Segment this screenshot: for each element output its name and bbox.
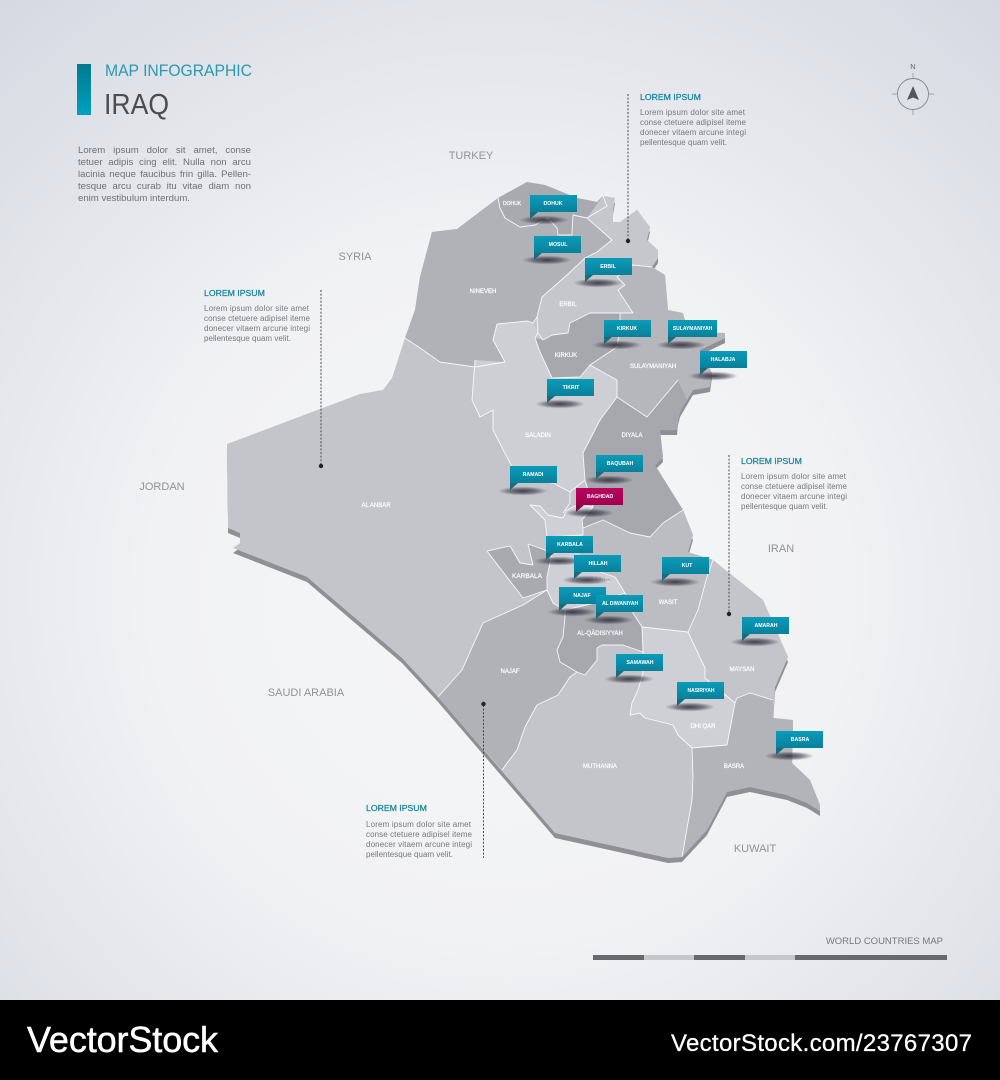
pin: Tikrit bbox=[535, 379, 594, 408]
pin: Karbala bbox=[534, 536, 593, 566]
pin: Samawah: SAMAWAH bbox=[626, 660, 654, 666]
pin: Dohuk bbox=[519, 195, 577, 224]
pin: Baqubah bbox=[584, 455, 643, 484]
footer band bbox=[0, 1000, 1000, 1080]
pin: Erbil: ERBIL bbox=[600, 264, 617, 270]
pin: Amarah: AMARAH bbox=[754, 623, 778, 629]
callout top: Lorem ipsum dolor site amet bbox=[640, 108, 746, 117]
pin: Kut: KUT bbox=[682, 563, 693, 569]
pin: Najaf: NAJAF bbox=[573, 593, 591, 599]
footer band: VectorStock.com/23767307 bbox=[671, 1030, 972, 1057]
callout right: conse ctetuere adipisel iteme bbox=[741, 482, 848, 491]
callout left: donecer vitaem arcune integi bbox=[204, 324, 310, 333]
region: Najaf bbox=[438, 590, 577, 770]
region: Saladin bbox=[472, 321, 617, 492]
callout bottom: LOREM IPSUM bbox=[366, 803, 427, 813]
callout right: donecer vitaem arcune integi bbox=[741, 492, 847, 501]
pin: Halabja bbox=[688, 351, 747, 380]
region: Erbil bbox=[537, 196, 658, 340]
pin: Ramadi bbox=[498, 466, 557, 496]
region: Dohuk bbox=[498, 182, 607, 235]
region: Wasit bbox=[578, 510, 713, 632]
region: Nineveh bbox=[405, 198, 612, 367]
region labels: DOHUK bbox=[503, 201, 522, 207]
pin: Halabja: HALABJA bbox=[711, 357, 736, 363]
callout bottom: Lorem ipsum dolor site amet bbox=[366, 820, 472, 829]
region: Kirkuk bbox=[535, 313, 620, 378]
region: Maysan bbox=[688, 560, 788, 703]
pin: Al Diwaniyah bbox=[584, 595, 643, 624]
pin: Al Diwaniyah: AL DIWANIYAH bbox=[602, 601, 638, 607]
pin: Kut bbox=[650, 557, 709, 586]
pin: Hillah bbox=[562, 555, 621, 584]
callout right: Lorem ipsum dolor site amet bbox=[741, 472, 847, 481]
callout top: pellentesque quam velit. bbox=[640, 138, 727, 147]
pin: Basra bbox=[764, 731, 823, 760]
pin: Kirkuk: KIRKUK bbox=[617, 326, 637, 332]
neighbouring country labels: SYRIA bbox=[338, 251, 372, 263]
map of Iraq bbox=[227, 182, 820, 863]
pin: Ramadi: RAMADI bbox=[523, 472, 544, 478]
pin: Kirkuk bbox=[592, 320, 651, 350]
pin: Erbil bbox=[573, 258, 632, 288]
pin: Sulaymaniyah: SULAYMANIYAH bbox=[673, 326, 713, 332]
intro paragraph bbox=[78, 145, 251, 204]
region labels: NINEVEH bbox=[470, 289, 496, 295]
neighbouring country labels: TURKEY bbox=[449, 150, 494, 162]
region labels: BASRA bbox=[724, 764, 744, 770]
scale caption: WORLD COUNTRIES MAP bbox=[826, 936, 943, 947]
callout left: pellentesque quam velit. bbox=[204, 334, 291, 343]
region labels: DHI QAR bbox=[690, 724, 716, 730]
callout top bbox=[626, 92, 747, 243]
region labels: DIYALA bbox=[622, 433, 642, 439]
callout top: donecer vitaem arcune integi bbox=[640, 128, 746, 137]
pin: Nasiriyah bbox=[665, 682, 724, 712]
region: Diyala bbox=[582, 380, 687, 537]
pin: Samawah bbox=[604, 654, 663, 684]
region: Muthanna bbox=[502, 645, 693, 858]
pin: Mosul: MOSUL bbox=[549, 242, 568, 248]
pin: Nasiriyah: NASIRIYAH bbox=[687, 688, 715, 694]
region labels: MUTHANNA bbox=[583, 764, 617, 770]
callout top: LOREM IPSUM bbox=[640, 92, 701, 102]
region: Karbala bbox=[487, 544, 552, 598]
callout bottom: conse ctetuere adipisel iteme bbox=[366, 830, 473, 839]
neighbouring country labels: JORDAN bbox=[139, 481, 185, 493]
pin: Dohuk: DOHUK bbox=[543, 201, 563, 207]
title: map infographic: MAP INFOGRAPHIC bbox=[105, 62, 252, 80]
region labels: AL-QĀDISIYYAH bbox=[577, 630, 623, 637]
region labels: KIRKUK bbox=[555, 353, 577, 359]
region labels: NAJAF bbox=[500, 669, 520, 675]
callout top: conse ctetuere adipisel iteme bbox=[640, 118, 747, 127]
map 3D depth bbox=[227, 187, 820, 863]
region labels: SALADIN bbox=[525, 433, 551, 439]
region labels: ERBIL bbox=[559, 302, 577, 308]
callout right: LOREM IPSUM bbox=[741, 456, 802, 466]
callout bottom bbox=[366, 702, 486, 859]
scale bar bbox=[593, 955, 947, 960]
pin: Hillah: HILLAH bbox=[588, 561, 608, 567]
footer band: VectorStock bbox=[27, 1019, 219, 1060]
callout right bbox=[727, 455, 848, 616]
region labels bbox=[361, 201, 754, 770]
pin: Najaf bbox=[547, 587, 606, 616]
neighbouring country labels: IRAN bbox=[768, 543, 794, 555]
region: Al-Qadisiyyah bbox=[557, 593, 643, 675]
region: Dhi Qar bbox=[630, 627, 735, 748]
pin: Mosul bbox=[522, 236, 581, 264]
callout bottom: pellentesque quam velit. bbox=[366, 850, 453, 859]
neighbouring country labels: KUWAIT bbox=[734, 843, 776, 855]
region labels: KARBALA bbox=[512, 573, 543, 580]
title accent bar bbox=[77, 64, 91, 115]
pin: Baghdad: BAGHDAD bbox=[587, 494, 614, 500]
region: Basra bbox=[682, 693, 820, 857]
callout left: Lorem ipsum dolor site amet bbox=[204, 304, 310, 313]
region labels: AL ANBAR bbox=[361, 503, 391, 509]
pin: Amarah bbox=[730, 617, 789, 646]
intro paragraph: lacinia neque faucibus frin gilla. Pellen- bbox=[78, 169, 251, 180]
region: Babil bbox=[547, 535, 625, 610]
pin: Basra: BASRA bbox=[791, 737, 809, 743]
icon: compass bbox=[892, 62, 934, 115]
callout left: conse ctetuere adipisel iteme bbox=[204, 314, 311, 323]
callout right: pellentesque quam velit. bbox=[741, 502, 828, 511]
region: Al Anbar bbox=[227, 182, 820, 858]
pin: Baqubah: BAQUBAH bbox=[607, 461, 634, 467]
pin: Baghdad bbox=[564, 488, 623, 518]
icon: compass: N bbox=[910, 62, 916, 71]
neighbouring country labels bbox=[139, 150, 794, 855]
region labels: SULAYMANIYAH bbox=[630, 364, 676, 370]
neighbouring country labels: SAUDI ARABIA bbox=[268, 687, 345, 699]
intro paragraph: Lorem ipsum dolor sit amet, conse bbox=[78, 145, 251, 156]
region labels: BABIL bbox=[592, 578, 610, 584]
region labels: WASIT bbox=[659, 600, 678, 606]
title: Iraq: IRAQ bbox=[104, 89, 169, 121]
region labels: MAYSAN bbox=[730, 667, 754, 673]
region: Sulaymaniyah bbox=[590, 265, 725, 417]
pin: Tikrit: TIKRIT bbox=[563, 385, 580, 391]
pin: Sulaymaniyah bbox=[656, 320, 717, 350]
intro paragraph: enim vestibulum interdum. bbox=[78, 193, 190, 204]
intro paragraph: tesque arcu curab itu vitae diam non bbox=[78, 181, 251, 192]
intro paragraph: tetuer adipis cing elit. Nulla non arcu bbox=[78, 157, 251, 168]
region: Baghdad bbox=[530, 505, 593, 537]
callout left: LOREM IPSUM bbox=[204, 288, 265, 298]
callout left bbox=[204, 288, 323, 468]
callout bottom: donecer vitaem arcune integi bbox=[366, 840, 472, 849]
pin: Karbala: KARBALA bbox=[557, 542, 583, 548]
